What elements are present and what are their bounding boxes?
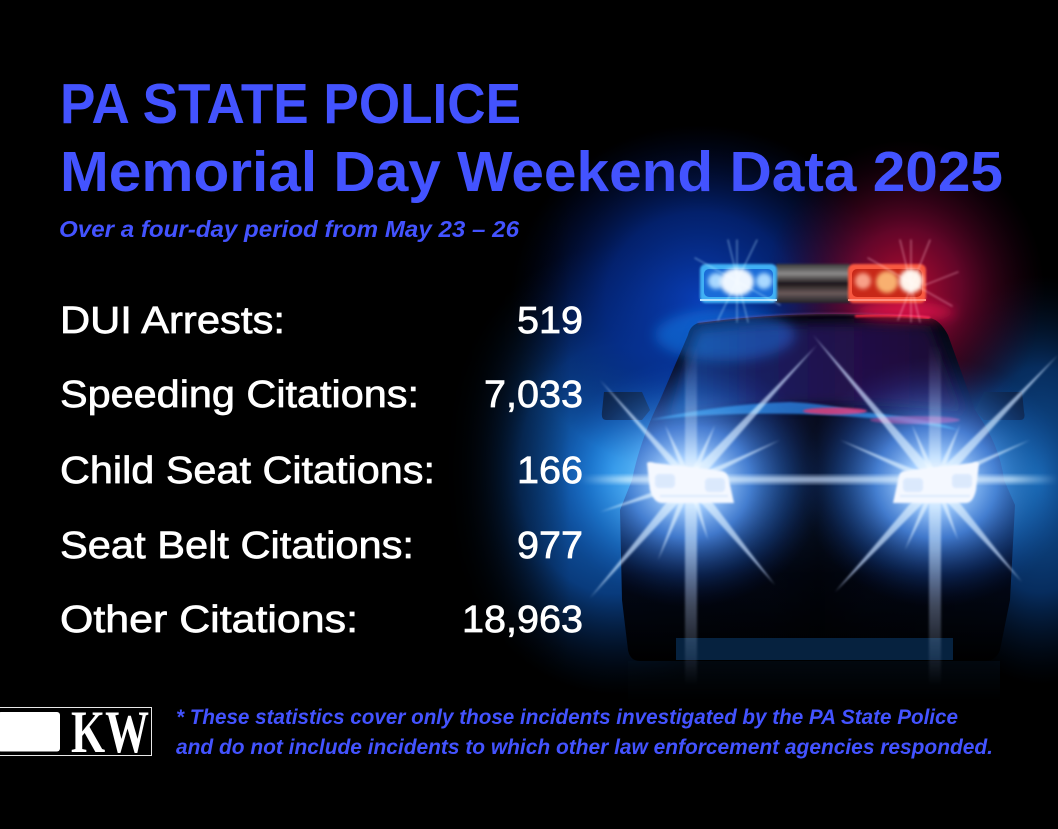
row: DUI arrests: DUI Arrests: xyxy=(60,300,285,342)
row: other citations: Other Citations: xyxy=(60,599,358,641)
footnote: * These statistics cover only those incidents investigated by the PA State Police xyxy=(176,706,958,729)
row: seat belt citations: 977 xyxy=(517,525,583,567)
row: child seat citations: 166 xyxy=(517,450,583,492)
roof glow xyxy=(655,302,955,361)
logo: KW xyxy=(0,699,152,765)
row: child seat citations xyxy=(60,450,583,492)
light bar xyxy=(695,240,958,322)
row: speeding citations: 7,033 xyxy=(484,374,583,416)
row: DUI arrests: 519 xyxy=(517,300,583,342)
logo: KW: KW xyxy=(71,699,149,765)
light bar sparkles xyxy=(695,240,958,322)
row: speeding citations xyxy=(60,374,583,416)
lens flares xyxy=(580,335,1058,685)
icon: left headlight xyxy=(647,462,734,503)
windshield xyxy=(668,323,962,418)
row: seat belt citations: Seat Belt Citations: xyxy=(60,525,414,567)
row: DUI arrests xyxy=(60,300,583,342)
statistics list xyxy=(60,300,583,641)
row: other citations xyxy=(60,599,583,641)
hood reflection line xyxy=(650,402,958,430)
title xyxy=(60,72,1003,204)
footnote xyxy=(176,706,993,759)
car body silhouette xyxy=(620,314,1015,661)
icon: left side mirror xyxy=(602,392,650,420)
police car photo xyxy=(440,90,1058,701)
title: PA STATE POLICE xyxy=(60,72,521,136)
row: speeding citations: Speeding Citations: xyxy=(60,374,419,416)
row: seat belt citations xyxy=(60,525,583,567)
bumper xyxy=(676,638,953,660)
ambient glow: side and top lights xyxy=(440,90,1058,695)
icon: right headlight xyxy=(893,462,979,503)
blue light section xyxy=(700,264,777,303)
subtitle: Over a four-day period from May 23 – 26 xyxy=(59,216,519,242)
icon: right side mirror xyxy=(975,392,1024,420)
footnote: and do not include incidents to which other law enforcement agencies responded. xyxy=(176,736,993,759)
row: other citations: 18,963 xyxy=(462,599,583,641)
headlight glow xyxy=(555,357,1058,607)
headlight inner detail xyxy=(655,474,972,497)
red light section xyxy=(848,264,926,303)
title: Memorial Day Weekend Data 2025 xyxy=(60,140,1003,204)
row: child seat citations: Child Seat Citations: xyxy=(60,450,435,492)
car reflection below bumper xyxy=(628,661,1000,701)
